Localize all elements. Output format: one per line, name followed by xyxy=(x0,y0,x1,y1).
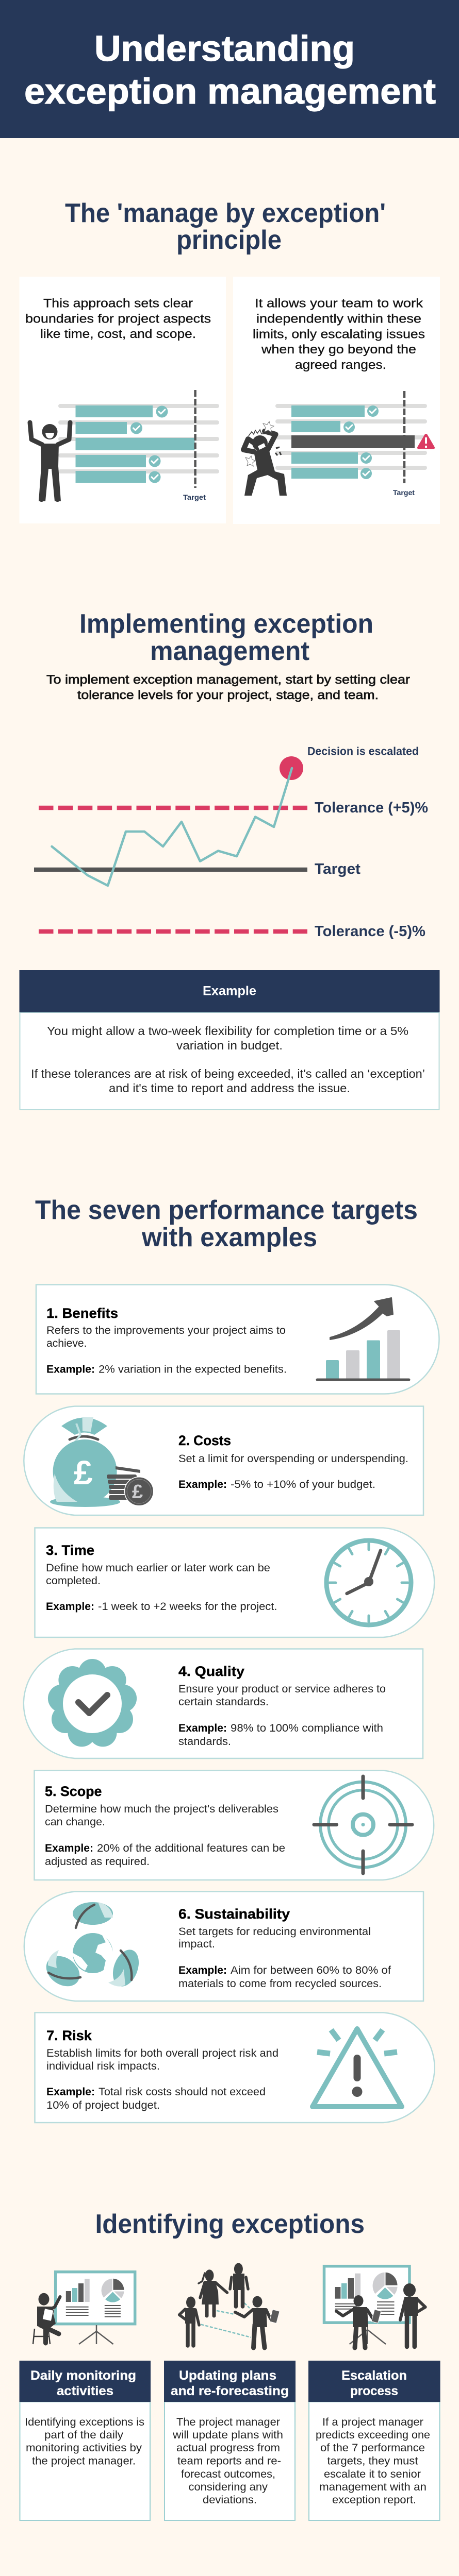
chart: tolerance line chart: Tolerance (-5)% xyxy=(315,923,425,940)
panel: 5 scope: can change. xyxy=(45,1816,105,1828)
chart: one bar exceeds target xyxy=(277,391,433,497)
panel: 6 sustainability: Aim for between 60% to 80% of xyxy=(231,1964,391,1976)
panel: 5 scope: Determine how much the project's deliverables xyxy=(45,1803,278,1815)
heading: seven performance targets: The seven performance targets xyxy=(35,1195,418,1225)
heading: implementing exception management: Implementing exception xyxy=(79,609,373,639)
panel: 2 costs xyxy=(24,1406,423,1515)
title banner xyxy=(0,0,459,138)
panel: 5 scope: 5. Scope xyxy=(45,1784,102,1799)
panel: escalation process xyxy=(308,2361,440,2520)
panel: escalation process: Escalation xyxy=(341,2368,407,2383)
panel: 4 quality: Example: xyxy=(178,1722,227,1734)
panel: updating plans and re-forecasting: considering any xyxy=(189,2481,268,2493)
panel: 1 benefits: achieve. xyxy=(46,1337,87,1349)
text block: independence: agreed ranges. xyxy=(295,358,386,372)
chart: all bars within target xyxy=(60,390,217,501)
panel: daily monitoring: the project manager. xyxy=(32,2455,136,2467)
text block: tolerance intro xyxy=(46,673,410,702)
panel: example: Example xyxy=(203,984,256,998)
icon: warning triangle xyxy=(313,2029,402,2107)
title banner: exception management xyxy=(24,71,436,111)
panel: updating plans and re-forecasting: and re-forecasting xyxy=(171,2384,289,2398)
panel: 1 benefits: Refers to the improvements your project aims to xyxy=(46,1325,286,1336)
panel: 7 risk: Example: xyxy=(46,2086,95,2098)
panel: updating plans and re-forecasting: The project manager xyxy=(176,2416,280,2428)
panel: escalation process: If a project manager xyxy=(322,2416,423,2428)
icon: recycling leaves and globe xyxy=(40,1902,143,1992)
text block: boundaries xyxy=(25,297,211,341)
illustration: escalation meeting xyxy=(324,2266,425,2348)
chart: tolerance line chart: Target xyxy=(315,861,360,877)
panel: escalation process: management with an xyxy=(319,2481,427,2493)
text block: tolerance intro: To implement exception management, start by setting clear xyxy=(46,673,410,687)
panel: 6 sustainability: Set targets for reducing environmental xyxy=(178,1926,371,1938)
panel: updating plans and re-forecasting: deviations. xyxy=(203,2494,257,2506)
illustration: team discussion xyxy=(179,2263,280,2348)
panel: 6 sustainability: impact. xyxy=(178,1938,215,1950)
text block: independence xyxy=(253,297,425,372)
chart: tolerance line chart: Decision is escalated xyxy=(307,745,419,757)
panel: daily monitoring: activities xyxy=(57,2384,113,2398)
text block: independence: It allows your team to work xyxy=(255,297,423,310)
heading: manage by exception xyxy=(65,198,386,255)
panel: example: If these tolerances are at risk of being exceeded, it's called an ‘exception’ xyxy=(31,1067,425,1080)
text block: tolerance intro: tolerance levels for your project, stage, and team. xyxy=(77,688,379,702)
panel: 6 sustainability: Example: xyxy=(178,1964,227,1976)
panel: 3 time: Define how much earlier or later work can be xyxy=(46,1562,270,1574)
panel: 1 benefits: 1. Benefits xyxy=(46,1306,118,1321)
text block: boundaries: This approach sets clear xyxy=(43,297,193,310)
panel: example: and it's time to report and address the issue. xyxy=(109,1081,350,1095)
panel: 4 quality: 98% to 100% compliance with xyxy=(231,1722,383,1734)
panel: 5 scope: Example: xyxy=(45,1842,93,1854)
panel: 2 costs: Set a limit for overspending or underspending. xyxy=(178,1453,408,1465)
text block: independence: independently within these xyxy=(256,312,421,326)
text block: independence: when they go beyond the xyxy=(261,343,416,357)
panel: 2 costs: -5% to +10% of your budget. xyxy=(231,1479,375,1490)
panel: 1 benefits: 2% variation in the expected benefits. xyxy=(99,1364,287,1376)
panel: 2 costs: 2. Costs xyxy=(178,1433,231,1448)
panel: updating plans and re-forecasting: forecast outcomes, xyxy=(181,2468,275,2480)
panel: escalation process: of the 7 performance xyxy=(320,2442,425,2454)
panel: 7 risk: Total risk costs should not exceed xyxy=(99,2086,266,2098)
panel: escalation process: exception report. xyxy=(332,2494,416,2506)
panel: 3 time: 3. Time xyxy=(46,1543,94,1558)
heading: implementing exception management xyxy=(79,609,373,666)
panel: 6 sustainability: materials to come from recycled sources. xyxy=(178,1978,382,1990)
panel: updating plans and re-forecasting: team reports and re- xyxy=(177,2455,281,2467)
heading: manage by exception: The 'manage by exception' xyxy=(65,198,386,228)
panel: 6 sustainability xyxy=(24,1892,423,2001)
panel: 3 time: -1 week to +2 weeks for the project. xyxy=(98,1601,277,1613)
panel: 5 scope: adjusted as required. xyxy=(45,1856,150,1868)
chart: one bar exceeds target: Target xyxy=(393,488,415,497)
panel: example: variation in budget. xyxy=(176,1039,283,1052)
panel: updating plans and re-forecasting xyxy=(164,2361,296,2520)
panel: daily monitoring: part of the daily xyxy=(44,2429,124,2441)
panel: clear boundaries xyxy=(20,277,226,523)
panel: 5 scope: 20% of the additional features can be xyxy=(97,1842,285,1854)
heading: manage by exception: principle xyxy=(176,225,282,255)
text block: independence: limits, only escalating issues xyxy=(253,328,425,341)
title banner: Understanding xyxy=(94,28,355,69)
chart: tolerance line chart: Tolerance (+5)% xyxy=(315,800,428,816)
panel: 4 quality: certain standards. xyxy=(178,1696,269,1708)
panel: 4 quality xyxy=(24,1649,423,1758)
icon: quality badge xyxy=(48,1659,137,1747)
icon: stressed figure xyxy=(243,421,287,496)
panel: 5 scope xyxy=(34,1770,434,1880)
heading: seven performance targets xyxy=(35,1195,418,1252)
panel: example: You might allow a two-week flexibility for completion time or a 5% xyxy=(47,1024,408,1038)
icon: money bag and coins: £ xyxy=(132,1481,143,1503)
panel: 7 risk: 7. Risk xyxy=(46,2028,92,2043)
icon: growth bars xyxy=(317,1298,409,1380)
icon: money bag and coins: £ xyxy=(74,1453,93,1492)
heading: implementing exception management: management xyxy=(150,636,309,666)
heading: identifying exceptions: Identifying exceptions xyxy=(95,2209,365,2239)
panel: 7 risk xyxy=(35,2012,435,2123)
panel: daily monitoring: monitoring activities by xyxy=(26,2442,142,2454)
illustration: presenter seated by chart xyxy=(33,2272,135,2344)
panel: updating plans and re-forecasting: Updating plans xyxy=(179,2368,276,2383)
panel: 2 costs: Example: xyxy=(178,1479,227,1490)
marker: escalation point xyxy=(280,756,303,780)
panel: escalation process: process xyxy=(350,2384,398,2398)
panel: 3 time: Example: xyxy=(46,1601,94,1613)
panel: updating plans and re-forecasting: actual progress from xyxy=(176,2442,280,2454)
panel: daily monitoring: Daily monitoring xyxy=(30,2368,136,2383)
panel: 4 quality: standards. xyxy=(178,1736,231,1748)
text block: boundaries: boundaries for project aspects xyxy=(25,312,211,326)
panel: escalation process: targets, they must xyxy=(327,2455,418,2467)
panel: 1 benefits xyxy=(36,1285,439,1394)
panel: independent work xyxy=(233,277,440,524)
heading: seven performance targets: with examples xyxy=(141,1223,317,1252)
chart: tolerance line chart xyxy=(34,745,428,940)
panel: 6 sustainability: 6. Sustainability xyxy=(178,1906,290,1922)
panel: 4 quality: Ensure your product or service adheres to xyxy=(178,1683,386,1695)
chart: all bars within target: Target xyxy=(183,493,206,501)
icon: happy figure xyxy=(30,422,70,501)
panel: 3 time: completed. xyxy=(46,1575,101,1587)
panel: 7 risk: 10% of project budget. xyxy=(46,2099,160,2111)
panel: escalation process: predicts exceeding one xyxy=(316,2429,430,2441)
panel: 1 benefits: Example: xyxy=(46,1364,95,1376)
panel: 7 risk: Establish limits for both overall project risk and xyxy=(46,2047,278,2059)
panel: 3 time xyxy=(35,1528,434,1637)
panel: example xyxy=(20,970,439,1110)
text block: boundaries: like time, cost, and scope. xyxy=(40,327,196,341)
panel: 7 risk: individual risk impacts. xyxy=(46,2060,160,2072)
icon: target xyxy=(314,1776,412,1873)
icon: clock xyxy=(326,1540,411,1625)
panel: daily monitoring xyxy=(20,2361,151,2520)
icon: money bag and coins xyxy=(50,1417,154,1507)
panel: 4 quality: 4. Quality xyxy=(178,1664,244,1679)
panel: escalation process: escalate it to senior xyxy=(324,2468,421,2480)
panel: updating plans and re-forecasting: will update plans with xyxy=(172,2429,283,2441)
panel: daily monitoring: Identifying exceptions is xyxy=(25,2416,144,2428)
